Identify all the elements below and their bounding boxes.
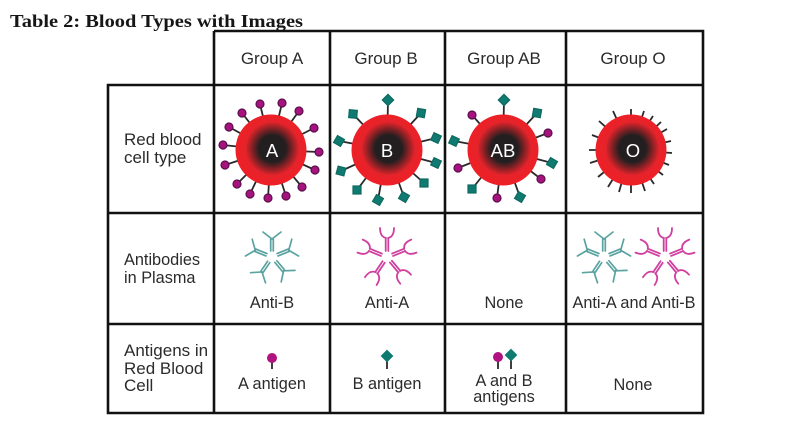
- antibodies: anti-B: Anti-B: [250, 294, 294, 312]
- table grid: [108, 31, 703, 413]
- antibodies: anti-B: [245, 232, 299, 312]
- row label: antigens in red blood cell: Antigens in: [124, 341, 208, 360]
- antibodies: anti-A and anti-B: Anti-A and Anti-B: [572, 294, 696, 312]
- red blood cell: group A: A: [266, 140, 279, 161]
- antigen: B: B antigen: [353, 375, 421, 393]
- antibodies: none: None: [485, 294, 523, 312]
- antibodies: anti-A and anti-B: [572, 228, 696, 312]
- red blood cell: group O: O: [626, 140, 640, 161]
- antigen: A: A antigen: [238, 375, 306, 393]
- antigen: B: [353, 350, 421, 393]
- antigen: none: None: [614, 376, 652, 394]
- row label: antigens in red blood cell: Red Blood: [124, 359, 203, 378]
- red blood cell: group AB: [449, 94, 557, 202]
- title: Table 2: Blood Types with Images: [10, 11, 303, 31]
- antigen: A: [238, 353, 306, 393]
- red blood cell: group B: B: [381, 140, 393, 161]
- column headers: [241, 49, 666, 68]
- row label: antibodies in plasma: in Plasma: [124, 269, 196, 287]
- column headers: Group O: [600, 49, 666, 68]
- red blood cell: group B: [334, 94, 441, 205]
- antigen: A and B: A and B: [475, 372, 533, 390]
- red blood cell: group AB: AB: [491, 140, 515, 161]
- row label: red blood cell type: Red blood: [124, 130, 202, 149]
- column headers: Group B: [354, 49, 418, 68]
- red blood cell: group A: [219, 99, 323, 202]
- row label: antigens in red blood cell: Cell: [124, 376, 153, 395]
- row label: red blood cell type: cell type: [124, 148, 186, 167]
- column headers: Group A: [241, 49, 304, 68]
- red blood cell: group O: [589, 109, 672, 193]
- antigen: A and B: antigens: [473, 388, 535, 406]
- antigen: A and B: [473, 349, 535, 406]
- row label: antibodies in plasma: Antibodies: [124, 251, 200, 269]
- antibodies: anti-A: Anti-A: [365, 294, 409, 312]
- column headers: Group AB: [467, 49, 541, 68]
- antibodies: anti-A: [357, 228, 417, 312]
